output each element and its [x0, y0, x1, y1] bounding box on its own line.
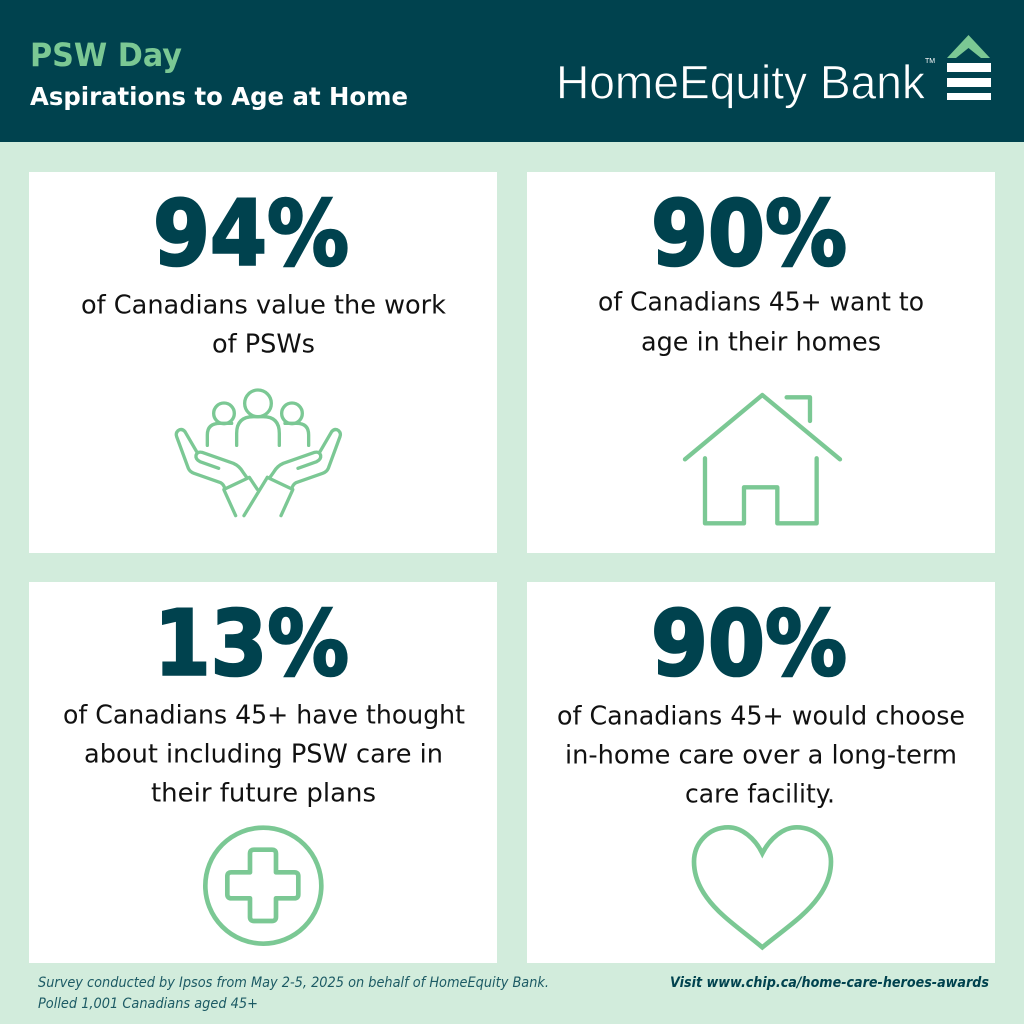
description: age in homes — [598, 288, 924, 358]
footer: survey note: Survey conducted by Ipsos from May 2-5, 2025 on behalf of HomeEquity Bank. — [38, 975, 549, 991]
footer: survey note — [38, 975, 549, 1012]
stat: 90%: 90% — [651, 592, 847, 696]
footer: website link: Visit www.chip.ca/home-care-heroes-awards — [670, 975, 989, 991]
description: PSW care in future plans: of Canadians 45+ have thought — [63, 700, 465, 730]
description: value of PSWs: of Canadians value the work — [81, 290, 446, 320]
panel: 90% in-home care — [527, 582, 995, 963]
footer: survey note: Polled 1,001 Canadians aged 45+ — [38, 996, 258, 1012]
header band — [0, 0, 1024, 142]
stat: 13%: 13% — [154, 592, 349, 696]
description: value of PSWs: of PSWs — [212, 330, 315, 360]
panel: 90% want to age at home — [527, 172, 995, 553]
description: in-home care choice: of Canadians 45+ would choose — [557, 702, 965, 732]
stat: 90%: 90% — [651, 182, 847, 286]
description: value of PSWs — [81, 290, 446, 360]
panel: 13% PSW care plans — [29, 582, 497, 963]
logo: HomeEquity Bank: TM — [925, 58, 935, 65]
description: PSW care in future plans: about including PSW care in — [84, 740, 443, 770]
description: in-home care choice: in-home care over a long-term — [565, 740, 957, 770]
description: PSW care in future plans — [63, 700, 465, 808]
description: in-home care choice — [557, 702, 965, 810]
logo: HomeEquity Bank: HomeEquity Bank — [556, 56, 925, 108]
icon: heart — [694, 827, 831, 947]
icon: medical cross — [205, 828, 321, 944]
header subtitle: Aspirations to Age at Home — [30, 82, 408, 111]
icon: house — [685, 395, 840, 523]
description: in-home care choice: care facility. — [685, 780, 835, 810]
description: age in homes: of Canadians 45+ want to — [598, 288, 924, 318]
stat: 94%: 94% — [153, 182, 349, 286]
description: age in homes: age in their homes — [641, 328, 881, 358]
description: PSW care in future plans: their future plans — [151, 778, 376, 808]
panel: 94% value PSWs — [29, 172, 497, 553]
header title: PSW Day: PSW Day — [30, 36, 182, 74]
logo: HomeEquity Bank — [556, 35, 991, 108]
icon: hands holding people — [176, 390, 340, 516]
